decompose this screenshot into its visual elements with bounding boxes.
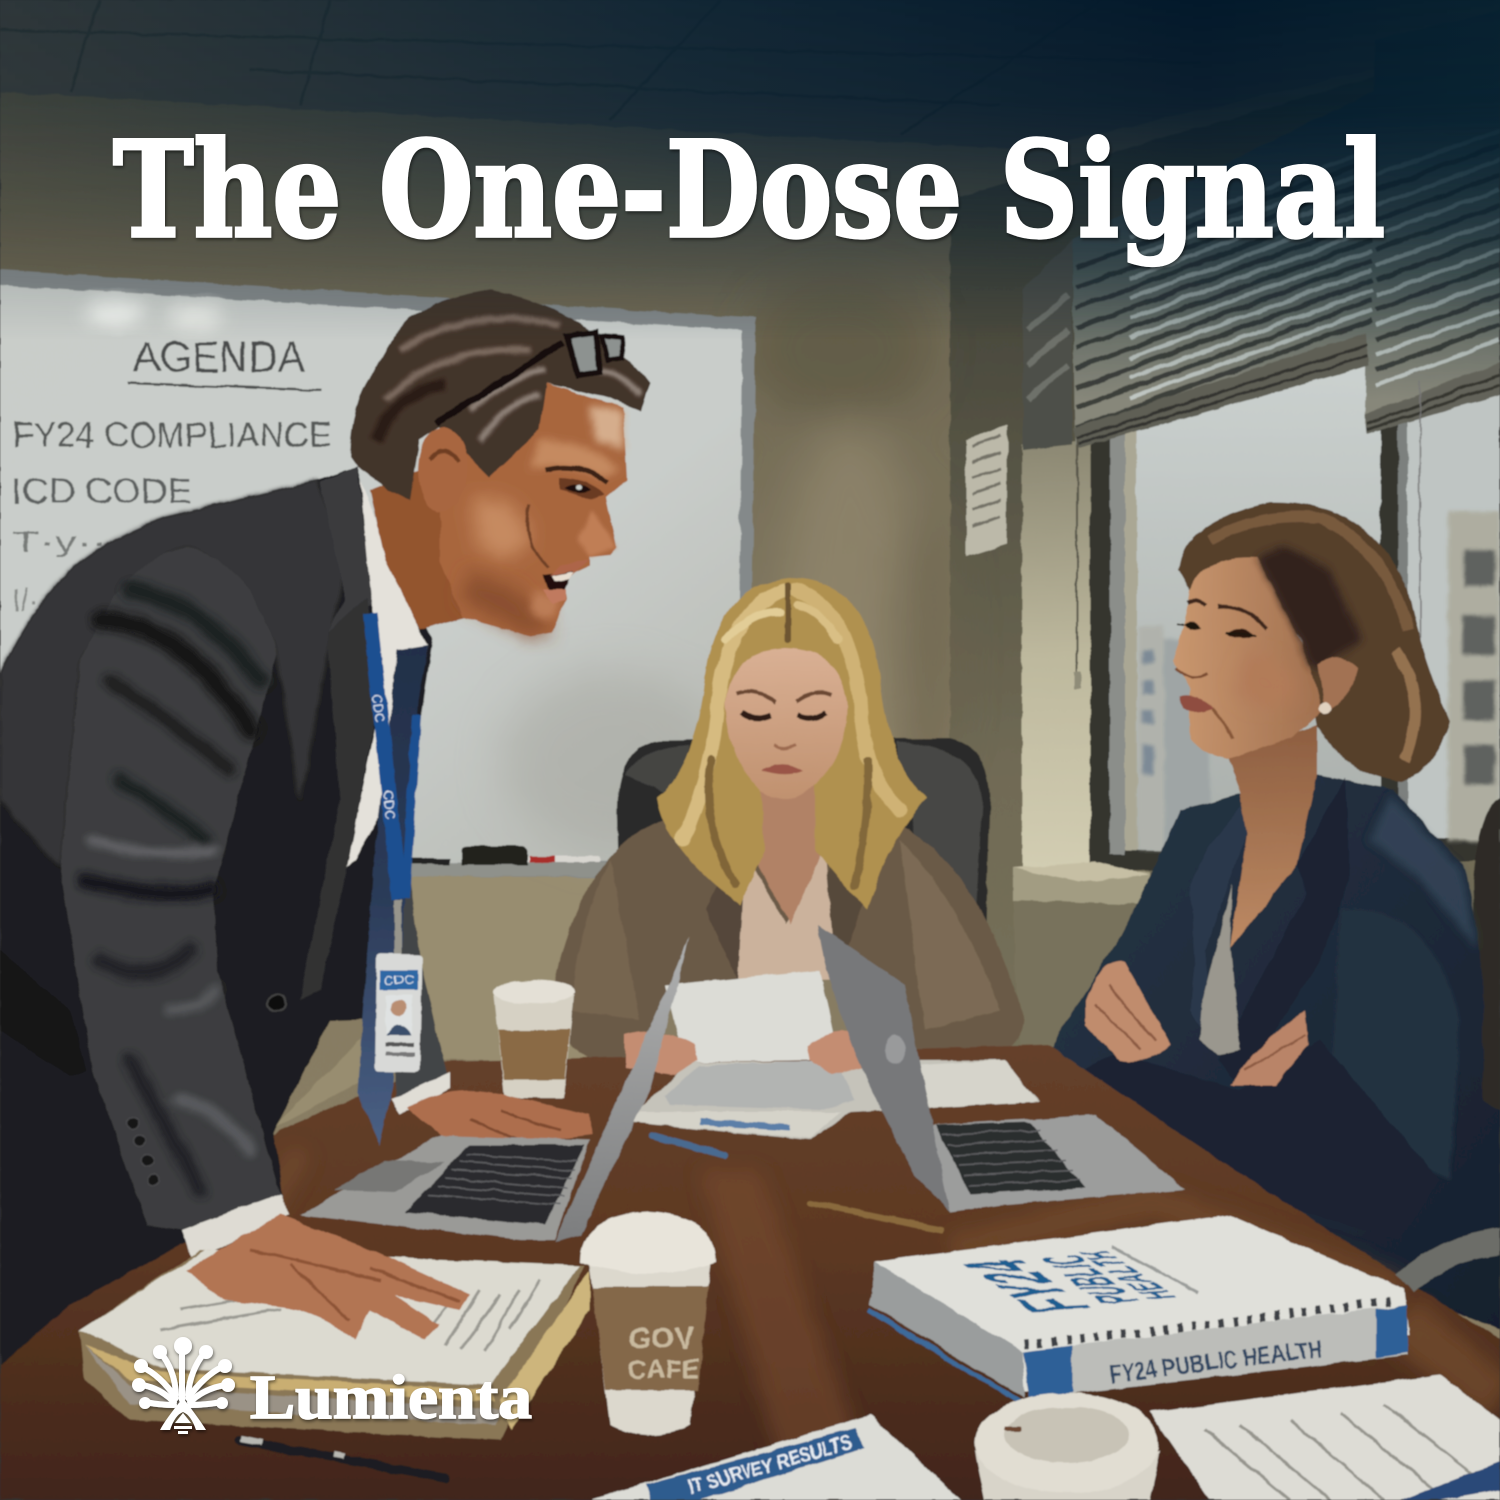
ear: [1318, 658, 1358, 712]
blouse: [1200, 885, 1240, 1055]
suit body: [0, 467, 433, 1365]
whiteboard text: AGENDA: [133, 333, 306, 382]
binder: PUBLIC: [1027, 1255, 1152, 1304]
neck: [370, 450, 480, 630]
blazer: [552, 790, 1024, 1064]
whiteboard: I/··: [12, 584, 49, 617]
coffee cup front: CAFE: [628, 1354, 699, 1384]
lanyard and badge: CDC: [369, 693, 388, 723]
crossed hands: [1085, 962, 1308, 1085]
binder: FY24: [943, 1257, 1112, 1314]
person: man leaning, left: [0, 290, 650, 1365]
blazer: [1051, 775, 1500, 1330]
far sleeve: [395, 860, 450, 1110]
lapel: [320, 467, 372, 633]
coffee cup back: [494, 980, 574, 1098]
cuff and back hand on laptop: [390, 1072, 592, 1145]
pens: [238, 1135, 940, 1478]
shirt: [347, 480, 428, 868]
laptop right: [818, 925, 1187, 1212]
laptop left: [300, 937, 690, 1242]
facial features: [736, 692, 832, 774]
chair arm, right: [1395, 1228, 1500, 1292]
neck: [750, 770, 822, 925]
icon: logo emblem: [132, 1337, 235, 1434]
hands holding paper: [625, 1032, 862, 1075]
facial features: [527, 468, 607, 604]
whiteboard: FY24 COMPLIANCE: [12, 416, 332, 455]
lanyard and badge: [369, 613, 422, 1072]
coffee cup front: [580, 1212, 716, 1435]
tie: [358, 645, 428, 1146]
face: [440, 383, 627, 637]
chair: [618, 738, 990, 960]
lower wall: [270, 870, 610, 1130]
sleeve: [60, 547, 283, 1230]
lanyard and badge: CDC: [380, 790, 399, 820]
papers centre: [628, 970, 1040, 1140]
notice on wall: [966, 425, 1007, 557]
whiteboard: ICD CODE: [12, 472, 192, 511]
whiteboard: [0, 270, 756, 878]
window with blinds: [1012, 10, 1500, 1050]
blouse: [738, 845, 835, 982]
window panes and frames: [1090, 330, 1500, 872]
pocket flap: [0, 950, 87, 1077]
binder: HEALTH: [1070, 1250, 1188, 1300]
cuff: [182, 1193, 288, 1262]
hair back: [657, 578, 927, 910]
ceiling: [0, 0, 1500, 150]
ID badge: CDC: [385, 973, 413, 988]
hair highlights: [682, 585, 900, 885]
binder: [868, 1215, 1410, 1402]
glasses on head: [437, 332, 623, 423]
wordmark: Lumienta: [250, 1364, 532, 1432]
sill: [1012, 862, 1150, 1050]
coffee cup front: GOV: [628, 1322, 695, 1355]
hair: [1178, 502, 1450, 782]
tray and marker: [410, 846, 755, 876]
papers bottom: IT SURVEY RESULTS: [685, 1431, 855, 1500]
face shading: [460, 405, 624, 637]
upper back: [0, 480, 345, 868]
chair behind: [1400, 798, 1500, 1300]
neck: [1227, 725, 1317, 948]
facial features: [1176, 600, 1331, 738]
papers bottom: [590, 1375, 1500, 1500]
right wall: [950, 40, 1500, 1100]
cream wall panel by the window: [1022, 440, 1092, 870]
wall light strokes: [750, 280, 955, 800]
blinds: [1023, 10, 1500, 450]
face: [725, 648, 847, 799]
face: [1173, 557, 1322, 759]
dark hair at temple: [1257, 545, 1362, 670]
sleeve folds: [85, 590, 260, 1190]
paper stack with hand: [80, 1215, 590, 1440]
table: [0, 1045, 1500, 1500]
hand on papers: [185, 1215, 470, 1340]
person: brunette woman, right: [1051, 502, 1500, 1330]
person: blonde woman, center: [552, 578, 1024, 1064]
ear: [418, 427, 468, 513]
logo: Lumienta: [132, 1337, 532, 1434]
coffee cup lower right: [975, 1393, 1160, 1500]
ID badge: [375, 954, 422, 1072]
cheek shade: [1235, 650, 1295, 706]
top shadow overlay: [0, 0, 1500, 340]
binder: FY24 PUBLIC HEALTH: [1107, 1335, 1324, 1389]
distant buildings: [1138, 512, 1500, 850]
hair: [350, 290, 650, 500]
whiteboard: T·y··: [12, 526, 107, 559]
